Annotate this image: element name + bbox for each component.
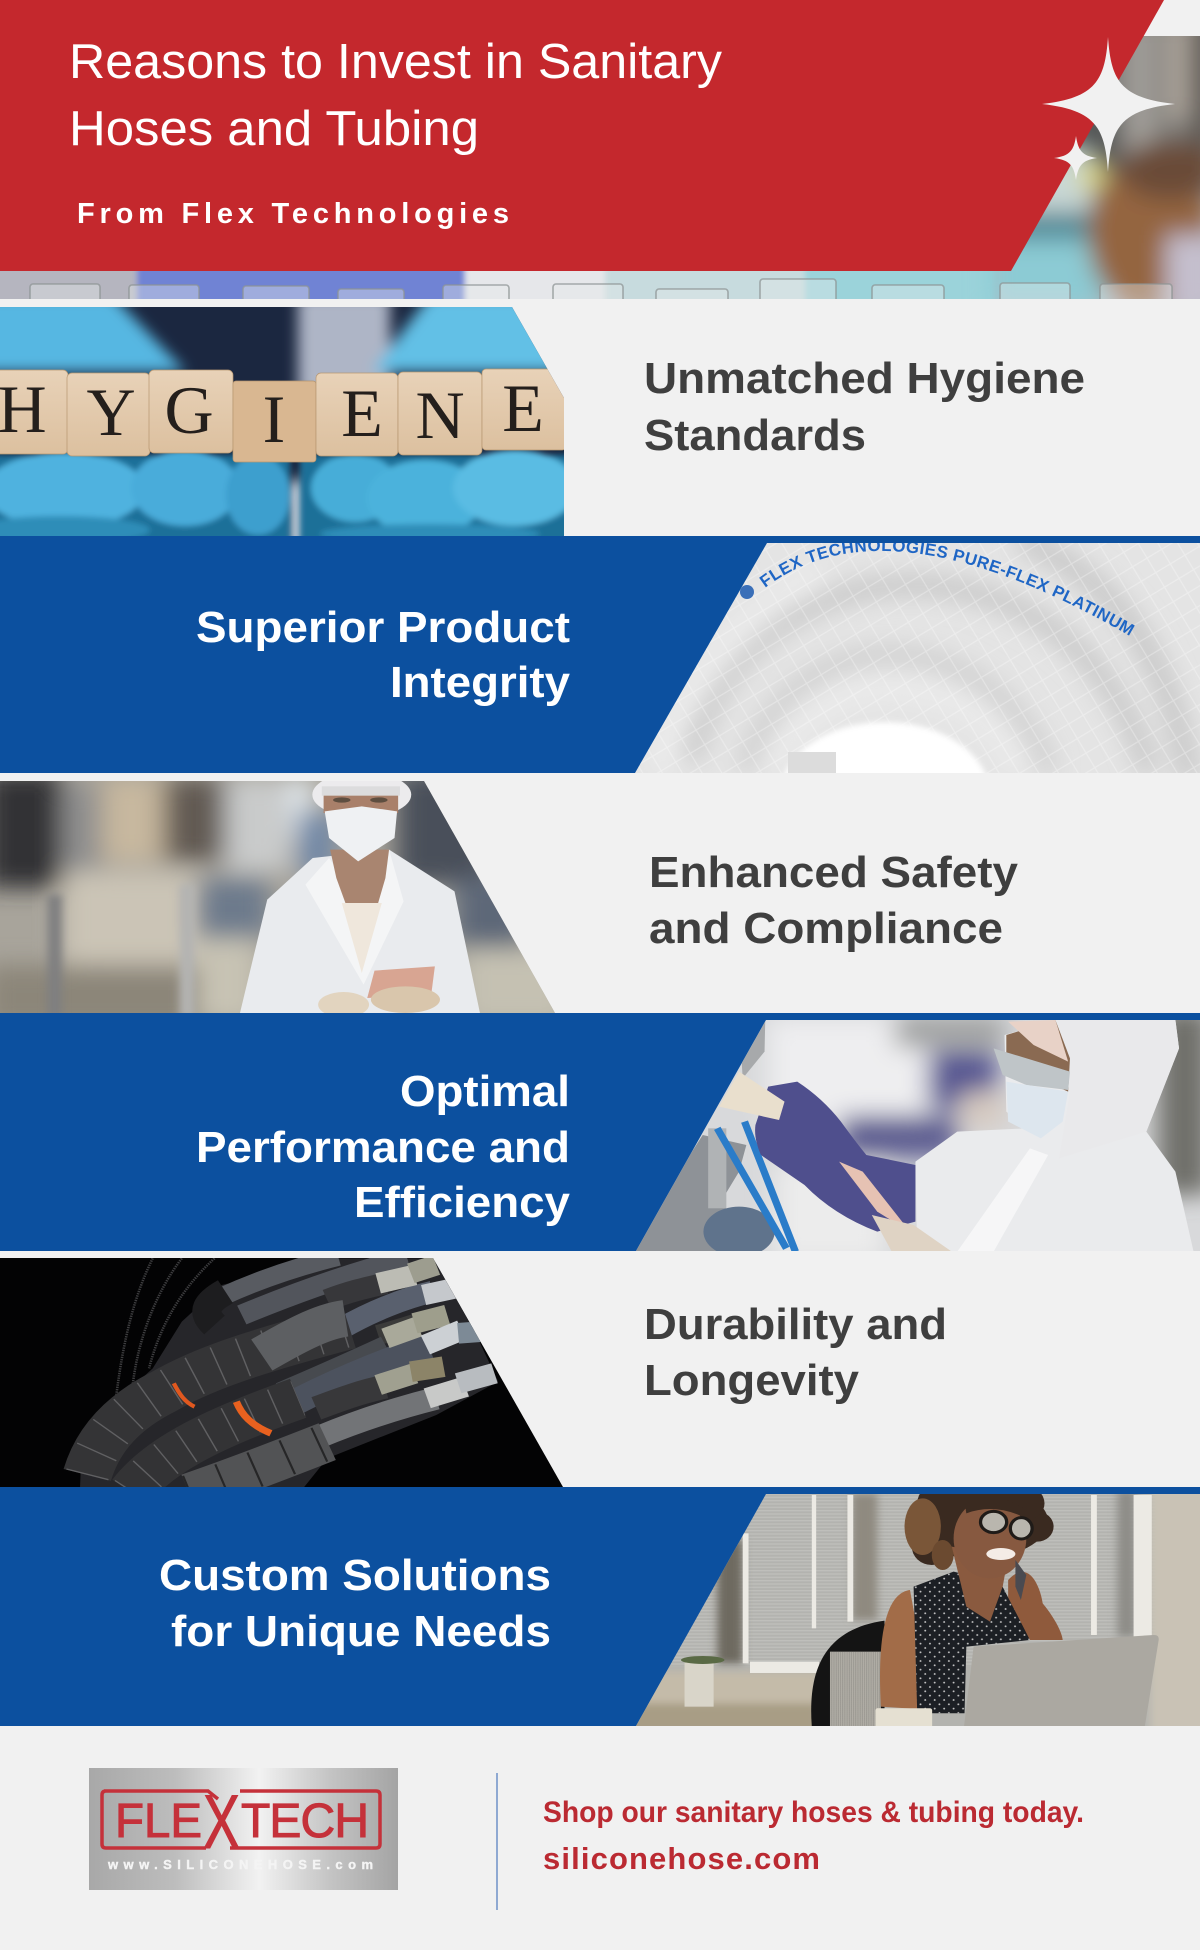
photo: technician in lab coat with tablet	[0, 781, 555, 1013]
curly hair	[906, 1483, 1054, 1565]
protective suit	[915, 1020, 1194, 1252]
header banner: red panel	[0, 0, 1164, 271]
icon: wooden letter blocks	[0, 369, 566, 462]
subtitle: From Flex Technologies	[77, 198, 509, 230]
panel: unmatched hygiene standards	[0, 307, 1084, 536]
coffee cup	[875, 1708, 932, 1728]
face and goggles	[1006, 1020, 1070, 1092]
heading	[649, 848, 1019, 953]
photo: glass vials in laboratory behind header	[0, 36, 1200, 299]
title: Reasons to Invest in Sanitary	[69, 35, 723, 89]
heading: Optimal	[400, 1067, 570, 1116]
metal fittings	[378, 1265, 494, 1398]
heading	[196, 1067, 571, 1227]
logo: Flextech: X	[203, 1780, 240, 1865]
logo: Flextech: www.SILICONEHOSE.com	[107, 1857, 373, 1872]
upper hoses	[222, 1257, 338, 1297]
tablet and hand	[839, 1162, 903, 1222]
hose bundle silhouette	[80, 1258, 498, 1490]
arms and shoulders	[880, 1590, 932, 1710]
office chair	[811, 1621, 885, 1728]
hair net	[312, 781, 412, 810]
divider	[496, 1773, 498, 1910]
potted plant	[685, 1662, 714, 1707]
panel: durability and longevity	[0, 1257, 947, 1493]
call to action	[543, 1796, 1084, 1876]
heading: for Unique Needs	[171, 1607, 551, 1656]
heading: Enhanced Safety	[649, 848, 1019, 897]
heading: Performance and	[196, 1123, 570, 1172]
heading: Standards	[644, 411, 866, 460]
photo: wooden blocks spelling hygiene on blue gloves: E	[502, 370, 544, 446]
photo: wooden blocks spelling hygiene on blue gloves: G	[164, 372, 214, 448]
photo: wooden blocks spelling hygiene on blue gloves: N	[415, 377, 465, 453]
call to action: siliconehose.com	[543, 1841, 820, 1876]
blue band	[0, 536, 1200, 773]
heading: Unmatched Hygiene	[644, 354, 1085, 403]
white opening inside the hose coil	[784, 720, 986, 773]
icon: small sparkle star	[1054, 136, 1097, 180]
blue band	[0, 1487, 1200, 1726]
printed hose lettering: FLEX TECHNOLOGIES PURE-FLEX PLATINUM	[759, 543, 1135, 636]
phone	[1015, 1560, 1026, 1600]
spiral wrapped bundle	[87, 1327, 349, 1475]
logo: Flextech: FLE	[115, 1795, 202, 1848]
sleeveless dotted top	[914, 1572, 1030, 1713]
orange inner hose accents	[174, 1383, 195, 1407]
heading: and Compliance	[649, 904, 1003, 953]
face	[954, 1498, 1026, 1578]
glasses	[981, 1511, 1032, 1539]
gloved hands	[371, 986, 440, 1013]
photo: wooden blocks spelling hygiene on blue gloves: I	[263, 381, 285, 457]
heading: Durability and	[644, 1300, 947, 1349]
panel: custom solutions for unique needs	[0, 1483, 1200, 1737]
heading: Efficiency	[354, 1178, 571, 1227]
icon: row of glass vials	[29, 278, 1173, 299]
panel: superior product integrity	[0, 536, 1200, 773]
heading	[159, 1551, 551, 1656]
photo: braided white hose	[635, 543, 1200, 773]
photo: wooden blocks spelling hygiene on blue gloves	[0, 307, 564, 536]
heading: Superior Product	[196, 603, 570, 652]
metal fitting	[636, 1135, 746, 1251]
title: Hoses and Tubing	[69, 102, 479, 156]
purple sleeve	[755, 1082, 915, 1232]
photo: wrapped industrial hoses on black	[0, 1257, 570, 1493]
heading	[644, 354, 1085, 460]
panel: enhanced safety and compliance	[0, 781, 1018, 1013]
lower hoses	[284, 1347, 429, 1408]
face mask	[325, 806, 397, 861]
thin braided background hoses	[116, 1258, 215, 1395]
lab coat	[240, 850, 480, 1013]
photo: cleanroom worker at sanitary equipment	[630, 1008, 1200, 1262]
footer	[89, 1768, 1084, 1910]
heading	[196, 603, 571, 707]
blue band	[0, 1013, 1200, 1251]
cream glove	[719, 1072, 785, 1120]
tablet	[367, 966, 435, 998]
title	[69, 35, 723, 156]
logo: Flextech: TECH	[241, 1795, 369, 1848]
heading	[644, 1300, 947, 1405]
blue tubes	[717, 1122, 795, 1252]
call to action: Shop our sanitary hoses & tubing today.	[543, 1796, 1084, 1829]
laptop	[964, 1635, 1159, 1728]
photo: smiling woman on phone at laptop	[636, 1494, 1200, 1726]
logo: Flextech	[89, 1768, 398, 1890]
photo: wooden blocks spelling hygiene on blue gloves: Y	[86, 374, 136, 450]
heading: Integrity	[390, 658, 571, 707]
icon: small brand mark on hose	[740, 585, 754, 599]
icon: large sparkle star	[1042, 37, 1175, 172]
heading: Custom Solutions	[159, 1551, 551, 1600]
heading: Longevity	[644, 1356, 860, 1405]
photo: wooden blocks spelling hygiene on blue gloves: E	[341, 375, 383, 451]
panel: optimal performance and efficiency	[0, 1008, 1200, 1262]
